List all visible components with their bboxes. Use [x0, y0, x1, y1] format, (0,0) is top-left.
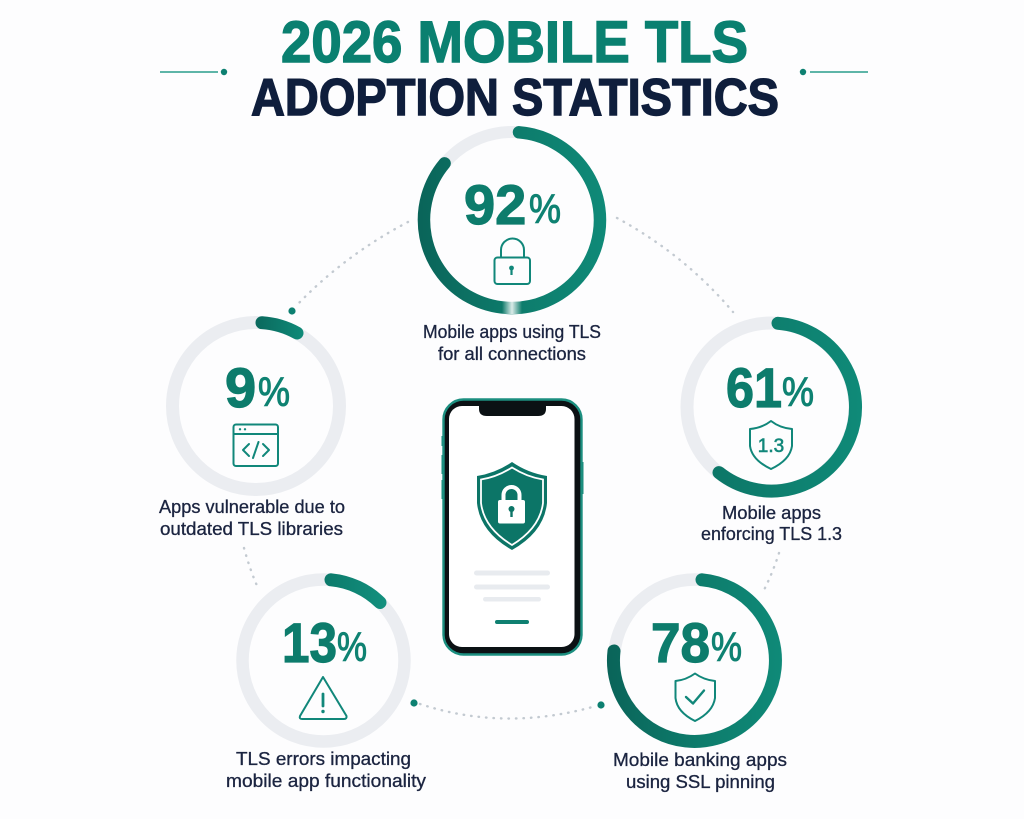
label: outdated TLS libraries: [159, 497, 345, 539]
label: Mobile apps using TLS: [423, 322, 601, 364]
title: ADOPTION STATISTICS: [251, 69, 779, 127]
value: 78%: 78: [651, 611, 710, 674]
phone notch: [479, 405, 546, 416]
label: outdated TLS libraries: outdated TLS libraries: [160, 519, 343, 539]
label: SSL pinning: [613, 750, 787, 792]
donut: 92%: [424, 132, 600, 314]
title ornament: right: [800, 69, 868, 75]
label: Mobile apps using TLS: for all connections: [438, 344, 586, 364]
dotted connectors: [244, 218, 779, 719]
value: 78%: [651, 611, 742, 674]
phone side buttons: [442, 436, 584, 499]
donut: 61%: [687, 323, 856, 491]
value: 61%: %: [782, 369, 814, 415]
label: TLS errors: TLS errors impacting: [236, 749, 411, 769]
icon: shield 1.3: [750, 421, 792, 469]
donut: 9%: [172, 322, 340, 490]
value: 9%: %: [258, 369, 290, 415]
central phone: [442, 400, 584, 654]
title ornament: left: [160, 69, 227, 75]
icon: warning triangle: [300, 677, 347, 719]
donut: 78%: [613, 580, 776, 742]
title: 2026 MOBILE TLS: [281, 10, 748, 75]
panel: 61% enforcing TLS 1.3: [687, 323, 856, 544]
label: SSL pinning: Mobile banking apps: [613, 750, 787, 770]
value: 92%: [464, 173, 561, 236]
label: enforcing TLS 1.3: [701, 503, 842, 544]
panel: 9% outdated TLS libraries: [159, 322, 345, 539]
label: enforcing TLS 1.3: Mobile apps: [722, 503, 821, 523]
panel: 13% TLS errors: [226, 580, 426, 791]
label: Mobile apps using TLS: Mobile apps using TLS: [423, 322, 601, 342]
label: enforcing TLS 1.3: enforcing TLS 1.3: [701, 524, 842, 544]
label: outdated TLS libraries: Apps vulnerable due to: [159, 497, 345, 517]
label: TLS errors: mobile app functionality: [226, 771, 426, 791]
screen teal button: [495, 620, 529, 624]
icon: shield 1.3: 1.3: [758, 436, 784, 457]
value: 61%: 61: [726, 356, 782, 419]
donut: 13%: [242, 580, 404, 742]
label: TLS errors: [226, 749, 426, 791]
value: 9%: [225, 356, 290, 419]
panel: 92% mobile apps using TLS: [423, 132, 601, 364]
screen text placeholder lines: [474, 570, 550, 602]
value: 13%: %: [337, 624, 367, 670]
phone screen: [449, 406, 574, 647]
value: 78%: %: [711, 624, 742, 670]
value: 9%: 9: [225, 356, 256, 419]
label: SSL pinning: using SSL pinning: [626, 772, 775, 792]
icon: padlock: [494, 238, 530, 284]
value: 92%: %: [529, 186, 561, 232]
shield with padlock: [477, 462, 547, 550]
phone body: [444, 400, 582, 654]
panel: 78% banking apps SSL pinning: [613, 580, 787, 792]
value: 13%: 13: [282, 611, 337, 674]
icon: shield check: [676, 674, 715, 721]
value: 92%: 92: [464, 173, 526, 236]
title: [251, 10, 779, 127]
icon: code window: [234, 424, 278, 466]
